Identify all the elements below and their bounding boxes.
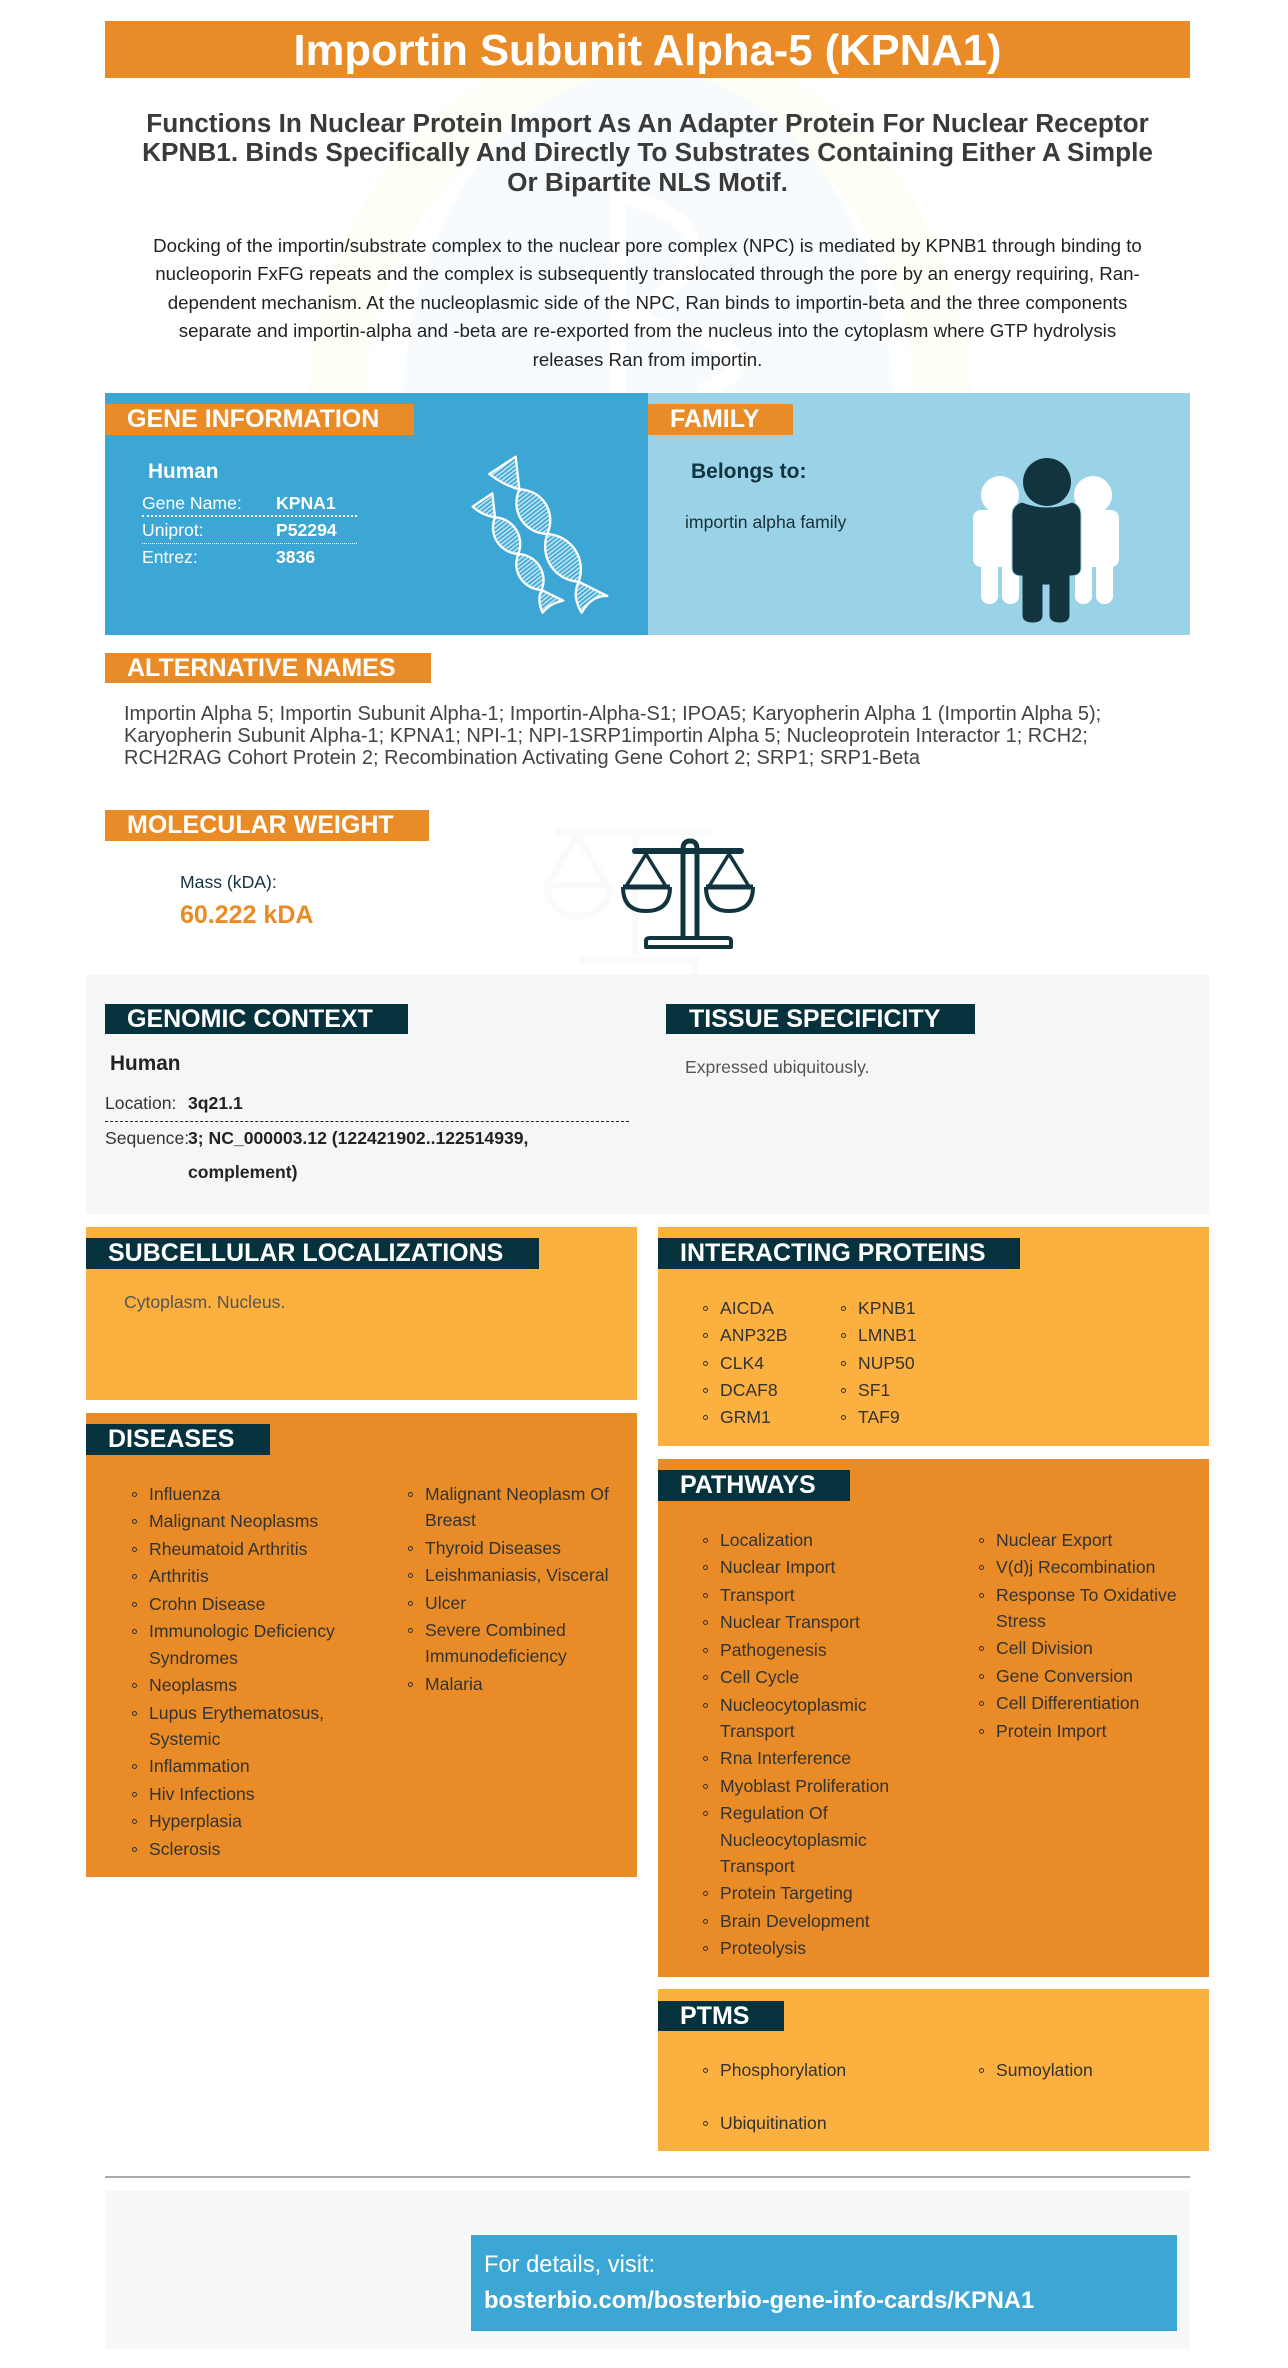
heading: family: FAMILY — [670, 405, 759, 433]
footer url: bosterbio.com/bosterbio-gene-info-cards/KPNA1 — [484, 2288, 1034, 2314]
callout: details link — [471, 2235, 1177, 2331]
disease list: Hiv Infections — [149, 1784, 255, 1804]
disease list: Severe Combined — [425, 1620, 566, 1640]
ptm list: Phosphorylation — [720, 2060, 846, 2080]
disease list: Sclerosis — [149, 1839, 220, 1859]
pathway list: Pathogenesis — [720, 1640, 827, 1660]
disease list: Crohn Disease — [149, 1594, 265, 1614]
disease list: Ulcer — [425, 1593, 466, 1613]
disease list: Malignant Neoplasm Of — [425, 1484, 609, 1504]
subtitle — [142, 108, 1153, 197]
tissue text: Expressed ubiquitously. — [685, 1057, 870, 1077]
pathway list: Response To Oxidative — [996, 1585, 1177, 1605]
disease list: Inflammation — [149, 1756, 250, 1776]
gene name row: Gene Name: — [142, 493, 242, 513]
ptm list: Sumoylation — [996, 2060, 1093, 2080]
ptm list: Ubiquitination — [720, 2113, 827, 2133]
disease list: Rheumatoid Arthritis — [149, 1539, 307, 1559]
location row: Location: — [105, 1093, 176, 1113]
disease list: Arthritis — [149, 1566, 209, 1586]
uniprot row — [142, 520, 337, 540]
title banner — [105, 21, 1190, 78]
pathway list: Nuclear Export — [996, 1530, 1112, 1550]
protein list: LMNB1 — [858, 1325, 917, 1345]
disease list: Immunologic Deficiency — [149, 1621, 335, 1641]
pathway list: Gene Conversion — [996, 1666, 1133, 1686]
protein list: ANP32B — [720, 1325, 787, 1345]
pathway list: Protein Targeting — [720, 1883, 853, 1903]
pathway list: Cell Cycle — [720, 1667, 799, 1687]
ptm list — [703, 2060, 1093, 2133]
pathway list: Cell Differentiation — [996, 1693, 1139, 1713]
uniprot row: Uniprot: — [142, 520, 204, 540]
disease list — [132, 1484, 609, 1859]
pathway list: V(d)j Recombination — [996, 1557, 1155, 1577]
heading: subcellular localizations: SUBCELLULAR LOCALIZATIONS — [108, 1239, 503, 1267]
heading: genomic context: GENOMIC CONTEXT — [127, 1005, 373, 1033]
heading: molecular weight: MOLECULAR WEIGHT — [127, 811, 394, 839]
disease list: Breast — [425, 1510, 476, 1530]
disease list: Malaria — [425, 1674, 483, 1694]
location row: 3q21.1 — [188, 1093, 243, 1113]
family value: importin alpha family — [685, 512, 846, 532]
description paragraph: Docking of the importin/substrate complex to the nuclear pore complex (NPC) is mediated by KPNB1 through binding to — [153, 235, 1142, 256]
background watermark logo — [310, 78, 970, 393]
disease list: Thyroid Diseases — [425, 1538, 561, 1558]
protein list — [703, 1298, 917, 1427]
panel: ptms — [658, 1989, 1209, 2151]
pathway list: Rna Interference — [720, 1748, 851, 1768]
protein list: DCAF8 — [720, 1380, 778, 1400]
disease list: Malignant Neoplasms — [149, 1511, 318, 1531]
uniprot row: P52294 — [276, 520, 337, 540]
heading: diseases: DISEASES — [108, 1425, 234, 1453]
heading: pathways — [658, 1470, 850, 1501]
panel: diseases — [86, 1413, 637, 1877]
pathway list: Stress — [996, 1611, 1046, 1631]
heading: family — [648, 404, 793, 435]
pathway list: Proteolysis — [720, 1938, 806, 1958]
panel: subcellular localizations — [86, 1227, 637, 1400]
disease list: Lupus Erythematosus, — [149, 1703, 324, 1723]
pathway list: Localization — [720, 1530, 813, 1550]
title banner: Importin Subunit Alpha-5 (KPNA1) — [294, 27, 1001, 75]
entrez row: Entrez: — [142, 547, 198, 567]
icon: balance scale — [621, 838, 755, 949]
heading: tissue specificity: TISSUE SPECIFICITY — [689, 1005, 940, 1033]
heading: gene information: GENE INFORMATION — [127, 405, 379, 433]
protein list: CLK4 — [720, 1353, 764, 1373]
pathway list: Protein Import — [996, 1721, 1106, 1741]
panel: family — [648, 393, 1190, 635]
description paragraph: nucleoporin FxFG repeats and the complex is subsequently translocated through the pore by an energy requiring, Ran- — [155, 263, 1140, 284]
panel: pathways — [658, 1459, 1209, 1977]
pathway list — [703, 1530, 1177, 1958]
protein list: GRM1 — [720, 1407, 771, 1427]
protein list: TAF9 — [858, 1407, 900, 1427]
subtitle: KPNB1. Binds Specifically And Directly To Substrates Containing Either A Simple — [142, 137, 1153, 167]
gene name row — [142, 493, 336, 513]
icon: people group — [973, 458, 1119, 622]
pathway list: Regulation Of — [720, 1803, 828, 1823]
sequence row: Sequence: — [105, 1128, 189, 1148]
localization text: Cytoplasm. Nucleus. — [124, 1292, 285, 1312]
heading: pathways: PATHWAYS — [680, 1471, 816, 1499]
footer label: For details, visit: — [484, 2252, 655, 2278]
panel: footer — [105, 2191, 1190, 2349]
panel: gene information — [105, 393, 648, 635]
pathway list: Nucleocytoplasmic — [720, 1830, 867, 1850]
alternative names text: Karyopherin Subunit Alpha-1; KPNA1; NPI-1; NPI-1SRP1importin Alpha 5; Nucleoprotein Interactor 1; RCH2; — [124, 725, 1088, 747]
description paragraph: separate and importin-alpha and -beta are re-exported from the nucleus into the cytoplasm where GTP hydrolysis — [179, 320, 1116, 341]
pathway list: Nuclear Transport — [720, 1612, 860, 1632]
alternative names text: Importin Alpha 5; Importin Subunit Alpha-1; Importin-Alpha-S1; IPOA5; Karyopherin Alpha 1 (Importin Alpha 5); — [124, 703, 1101, 725]
pathway list: Brain Development — [720, 1911, 870, 1931]
description paragraph — [153, 235, 1142, 370]
pathway list: Transport — [720, 1721, 795, 1741]
sequence row — [105, 1128, 528, 1182]
pathway list: Nucleocytoplasmic — [720, 1695, 867, 1715]
alternative names text: RCH2RAG Cohort Protein 2; Recombination Activating Gene Cohort 2; SRP1; SRP1-Beta — [124, 747, 920, 769]
description paragraph: dependent mechanism. At the nucleoplasmic side of the NPC, Ran binds to importin-beta and the three components — [168, 292, 1127, 313]
pathway list: Transport — [720, 1856, 795, 1876]
pathway list: Cell Division — [996, 1638, 1093, 1658]
heading: interacting proteins: INTERACTING PROTEINS — [680, 1239, 986, 1267]
pathway list: Myoblast Proliferation — [720, 1776, 889, 1796]
mass value: 60.222 kDA — [180, 901, 313, 929]
protein list: AICDA — [720, 1298, 774, 1318]
gene name row: KPNA1 — [276, 493, 336, 513]
location row — [105, 1093, 243, 1113]
disease list: Immunodeficiency — [425, 1646, 567, 1666]
subtitle: Functions In Nuclear Protein Import As An Adapter Protein For Nuclear Receptor — [146, 108, 1149, 138]
entrez row: 3836 — [276, 547, 315, 567]
sequence row: complement) — [188, 1162, 298, 1182]
entrez row — [142, 547, 315, 567]
description paragraph: releases Ran from importin. — [533, 349, 762, 370]
heading: ptms — [658, 2001, 784, 2031]
mass label: Mass (kDA): — [180, 872, 277, 892]
disease list: Leishmaniasis, Visceral — [425, 1565, 609, 1585]
pathway list: Nuclear Import — [720, 1557, 835, 1577]
heading: ptms: PTMS — [680, 2002, 749, 2030]
disease list: Syndromes — [149, 1648, 238, 1668]
species label: Human — [148, 460, 218, 483]
sequence row: 3; NC_000003.12 (122421902..122514939, — [188, 1128, 528, 1148]
species label: Human — [110, 1052, 180, 1075]
heading: alternative names: ALTERNATIVE NAMES — [127, 654, 396, 682]
subtitle: Or Bipartite NLS Motif. — [507, 167, 788, 197]
protein list: KPNB1 — [858, 1298, 916, 1318]
icon: dna helix — [471, 456, 608, 614]
panel: genomic context and tissue specificity — [86, 975, 1209, 1214]
disease list: Neoplasms — [149, 1675, 237, 1695]
alternative names text — [124, 703, 1101, 769]
disease list: Hyperplasia — [149, 1811, 242, 1831]
belongs to label: Belongs to: — [691, 460, 806, 483]
gene fields table — [142, 493, 357, 567]
protein list: SF1 — [858, 1380, 890, 1400]
pathway list: Transport — [720, 1585, 795, 1605]
disease list: Influenza — [149, 1484, 220, 1504]
protein list: NUP50 — [858, 1353, 915, 1373]
heading: diseases — [86, 1424, 270, 1455]
disease list: Systemic — [149, 1729, 220, 1749]
panel: interacting proteins — [658, 1227, 1209, 1446]
